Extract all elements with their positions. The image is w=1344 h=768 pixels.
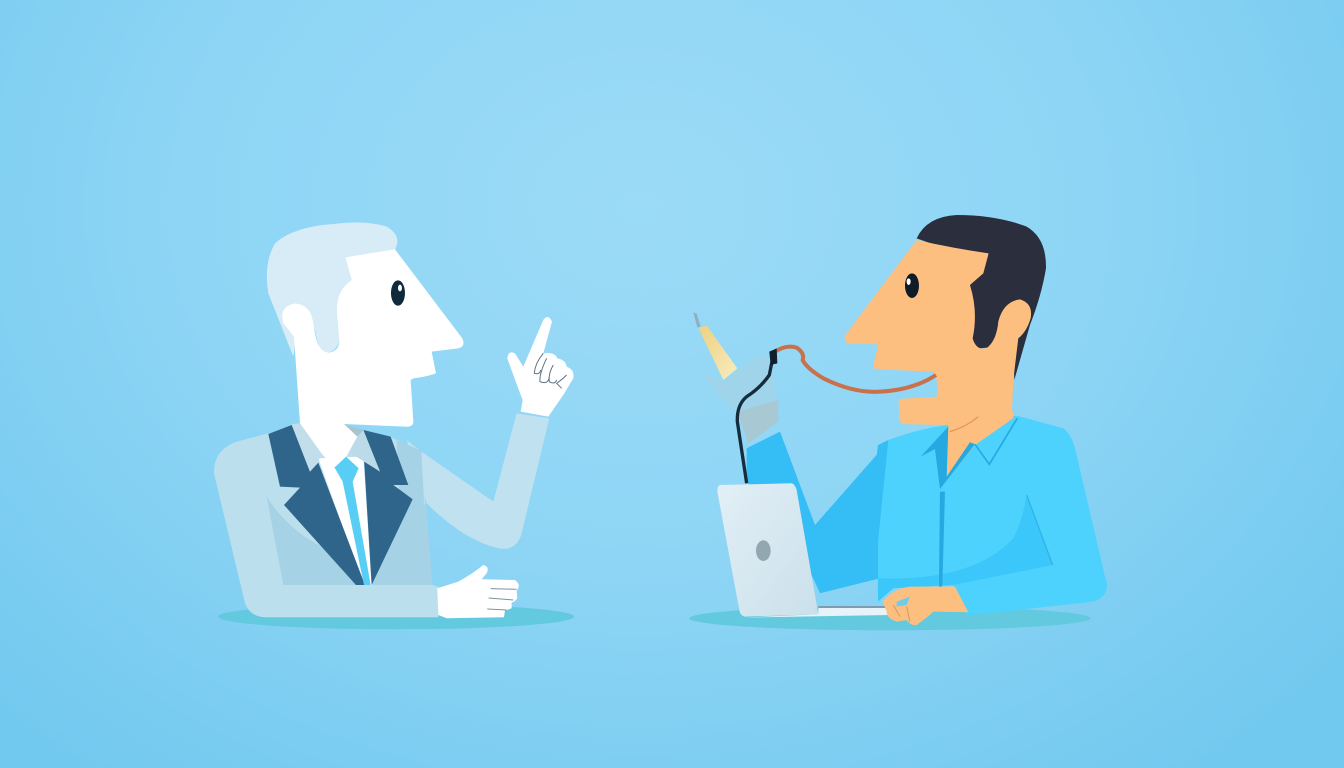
figure: businessman on the left (214, 222, 574, 629)
hand on keyboard (883, 587, 968, 625)
shirt body (878, 416, 1107, 616)
neck (947, 412, 1013, 480)
chin crease (950, 417, 978, 432)
lapels (268, 425, 365, 585)
table shadow: right (689, 606, 1091, 630)
collar (921, 418, 1017, 489)
pointing hand (507, 317, 574, 417)
eye (391, 280, 405, 306)
hair (267, 222, 397, 357)
neck and face (282, 249, 463, 467)
laptop (717, 483, 893, 618)
figure: man with laptop on the right (689, 215, 1107, 630)
cable from mouth (775, 347, 936, 392)
black cable to laptop (737, 355, 773, 483)
suit body (214, 433, 438, 617)
eye (905, 273, 919, 298)
sleeve fold (1027, 495, 1053, 565)
raised arm: blue sleeve (747, 432, 893, 593)
shirt shading (878, 495, 1053, 602)
tie (334, 457, 371, 585)
resting hand (437, 565, 519, 618)
suit shading (267, 440, 432, 585)
face and neck (845, 240, 1031, 425)
raised arm (407, 413, 549, 549)
hair (917, 215, 1046, 380)
pen held in faded hand (693, 312, 778, 443)
table shadow: left (218, 604, 574, 629)
collar (292, 423, 325, 472)
shirt (318, 457, 372, 585)
